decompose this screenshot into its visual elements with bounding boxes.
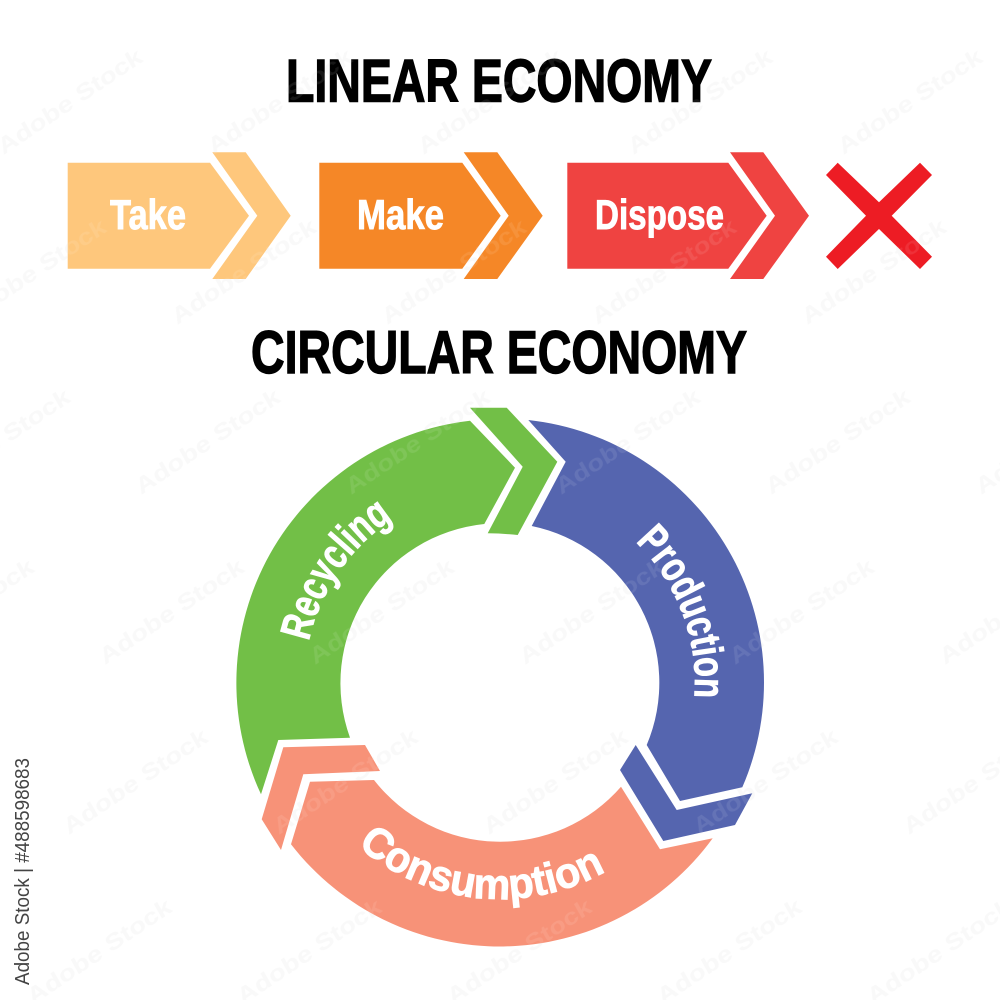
segment: recycling: Recycling: [280, 501, 394, 640]
circular diagram: [236, 408, 764, 946]
arrow: make: Make: [357, 191, 444, 238]
title: circular economy: CIRCULAR ECONOMY: [251, 319, 747, 386]
arrow: take: [68, 152, 291, 279]
segment: production: Production: [636, 522, 725, 696]
stock credit: Adobe Stock | #488598683: [12, 758, 34, 985]
segment: consumption: Consumption: [363, 828, 604, 908]
segment: recycling: [236, 408, 558, 794]
segment: production: [528, 420, 764, 841]
icon: red cross: [826, 163, 932, 269]
segment: consumption: [262, 745, 713, 946]
arrow: dispose: Dispose: [595, 191, 724, 238]
arrow: take: Take: [110, 191, 186, 238]
arrow: make: [319, 152, 543, 279]
title: linear economy: LINEAR ECONOMY: [286, 48, 712, 115]
arrow: dispose: [567, 152, 809, 279]
